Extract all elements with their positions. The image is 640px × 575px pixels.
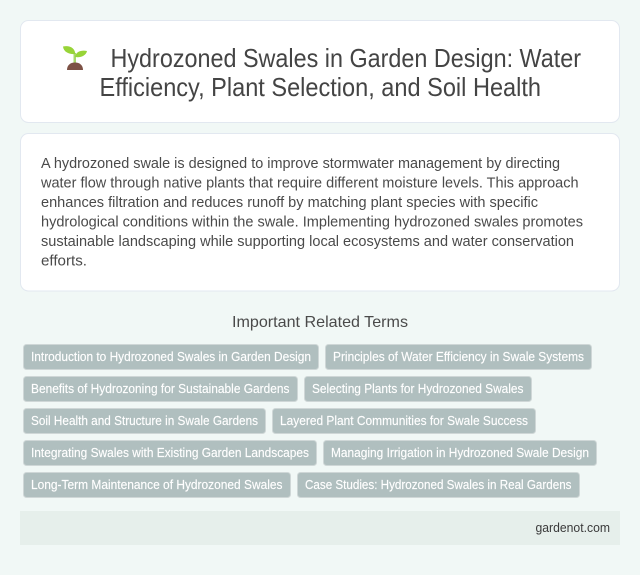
panel: title card — [20, 20, 620, 122]
text block: description: hydrological conditions within the swale. Implementing hydrozoned swales promotes — [41, 214, 583, 230]
tag: soil health: Soil Health and Structure in Swale Gardens — [31, 413, 258, 428]
text block: description: enhances filtration and reduces runoff by matching plant species with specific — [41, 195, 538, 211]
text block: description: water flow through native plants that require different moisture levels. This approach — [40, 176, 578, 192]
tag: introduction — [24, 344, 318, 370]
panel: related term tags — [24, 344, 596, 498]
text block: description: A hydrozoned swale is designed to improve stormwater management by directing — [41, 156, 560, 172]
tag: case studies — [298, 472, 580, 498]
tag: selecting plants: Selecting Plants for Hydrozoned Swales — [312, 381, 524, 396]
title: Efficiency, Plant Selection, and Soil Health — [100, 74, 541, 102]
text block: description — [40, 156, 583, 270]
tag: long-term maintenance: Long-Term Maintenance of Hydrozoned Swales — [31, 477, 282, 492]
text block: description: efforts. — [41, 254, 87, 270]
tag: benefits: Benefits of Hydrozoning for Sustainable Gardens — [31, 381, 290, 396]
tag: long-term maintenance — [24, 472, 290, 498]
tag: case studies: Case Studies: Hydrozoned Swales in Real Gardens — [305, 477, 572, 492]
footer source text: gardenot.com — [536, 520, 610, 535]
tag: principles: Principles of Water Efficiency in Swale Systems — [333, 349, 584, 364]
tag: layered plant communities: Layered Plant Communities for Swale Success — [280, 413, 528, 428]
tag: principles — [326, 344, 592, 370]
title — [100, 45, 581, 102]
tag: managing irrigation — [324, 440, 596, 466]
title: Hydrozoned Swales in Garden Design: Water — [110, 45, 581, 73]
tag: integrating swales — [24, 440, 316, 466]
tag: soil health — [24, 408, 266, 434]
tag: managing irrigation: Managing Irrigation in Hydrozoned Swale Design — [331, 445, 589, 460]
panel: footer — [20, 511, 620, 545]
tag: benefits — [24, 376, 298, 402]
text block: description: sustainable landscaping while supporting local ecosystems and water conservation — [41, 234, 574, 250]
tag: introduction: Introduction to Hydrozoned Swales in Garden Design — [31, 349, 311, 364]
heading: important related terms: Important Related Terms — [232, 314, 408, 331]
tag: layered plant communities — [272, 408, 536, 434]
tag: integrating swales: Integrating Swales with Existing Garden Landscapes — [31, 445, 309, 460]
panel: description card — [20, 134, 620, 291]
icon: sprout — [63, 46, 87, 70]
tag: selecting plants — [304, 376, 532, 402]
